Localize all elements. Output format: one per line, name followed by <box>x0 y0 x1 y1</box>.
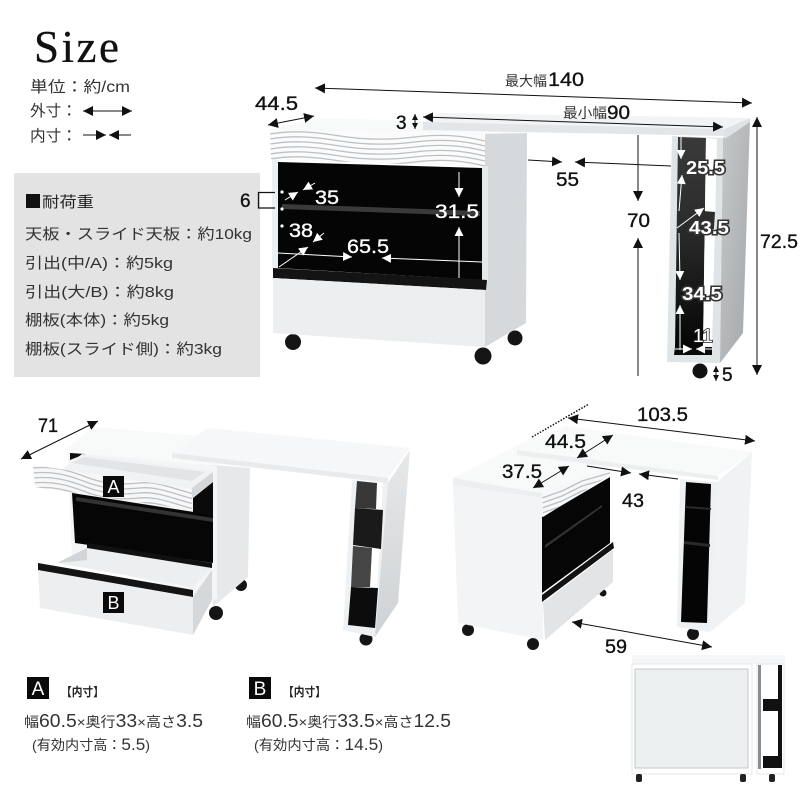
panel: load capacity: 棚板(本体)：約5kg <box>25 312 169 329</box>
dimension: 65.5: 65.5 <box>347 237 389 258</box>
dimension: 43: 43 <box>622 491 644 512</box>
inner size A <box>24 677 203 754</box>
label B <box>103 592 124 613</box>
dimension: 44.5 <box>545 432 613 458</box>
heading: load capacity <box>26 194 94 211</box>
dimension: 5 caster: 5 <box>722 365 733 386</box>
dimension: 6 shelf pitch <box>240 191 275 212</box>
panel: load capacity <box>14 173 260 377</box>
inner size B: (有効内寸高：14.5) <box>254 735 383 754</box>
panel: load capacity: 棚板(スライド側)：約3kg <box>25 341 222 358</box>
dimension: 59: 59 <box>605 637 627 658</box>
slide leg <box>343 450 410 637</box>
dimension: 43.5: 43.5 <box>689 218 729 238</box>
inner size B: 【内寸】 <box>283 684 326 699</box>
inner size A: (有効内寸高：5.5) <box>32 735 150 754</box>
dimension: 103.5: 103.5 <box>637 405 688 426</box>
dimension: 31.5: 31.5 <box>435 202 479 223</box>
dimension: 44.5 depth: 44.5 <box>255 94 298 115</box>
dimension: 35: 35 <box>315 188 339 209</box>
legend: units and arrows: 外寸： <box>30 102 77 120</box>
dimension: 43 <box>587 466 678 512</box>
dimension: 37.5 <box>502 462 569 488</box>
label B: B <box>107 593 120 613</box>
dimension: 44.5 depth <box>255 94 314 125</box>
panel: load capacity: 引出(中/A)：約5kg <box>25 255 173 272</box>
dimension: 11: 11 <box>693 326 713 346</box>
product: rotated L view <box>453 450 752 650</box>
dotted guide <box>532 404 589 437</box>
product: main view cabinet <box>270 118 527 364</box>
inner size A: 【内寸】 <box>61 684 104 699</box>
panel: load capacity: 引出(大/B)：約8kg <box>25 284 174 301</box>
inner size B: 幅60.5×奥行33.5×高さ12.5 <box>246 711 451 731</box>
legend: units and arrows: 内寸： <box>30 127 77 145</box>
dimension: 70: 70 <box>627 211 650 232</box>
dimension: 3 thickness <box>396 113 415 134</box>
heading: load capacity: 耐荷重 <box>42 194 94 211</box>
dimension: 38 <box>279 221 324 267</box>
dimension: 34.5 <box>679 233 722 350</box>
product: main view slide top <box>423 113 750 378</box>
dimension: 31.5 <box>435 172 479 278</box>
dimension: 38: 38 <box>289 221 313 242</box>
dimension: 103.5 <box>568 405 755 441</box>
dimension: max width <box>315 68 752 103</box>
dimension: 44.5: 44.5 <box>545 432 586 453</box>
dimension: 35 <box>285 183 339 209</box>
dimension: 11 <box>675 326 713 349</box>
dimensions: main view <box>240 68 798 386</box>
badge A: A <box>32 679 45 700</box>
dimension: min width <box>423 103 723 127</box>
inner size B <box>246 677 451 754</box>
dimension: 72.5: 72.5 <box>760 232 798 253</box>
dimension: max width: 最大幅 <box>505 73 547 89</box>
badge B: B <box>254 679 266 700</box>
dimension: 6 shelf pitch: 6 <box>240 191 251 212</box>
legend: units and arrows <box>30 78 132 145</box>
legend: units and arrows: 単位：約/cm <box>30 78 130 96</box>
rotated leg <box>677 452 752 632</box>
dimension: 71 <box>21 416 98 459</box>
dimension: min width: 90 <box>607 103 630 124</box>
dimension: 59 <box>572 622 712 658</box>
dimension: 55 <box>528 160 671 191</box>
dimension: 37.5: 37.5 <box>502 462 542 483</box>
dimension: min width: 最小幅 <box>563 105 607 121</box>
dimension: 25.5: 25.5 <box>686 158 725 178</box>
dimension: 3 thickness: 3 <box>396 113 407 134</box>
dimension: 5 caster <box>716 365 733 386</box>
title: Size <box>34 22 121 72</box>
dimension: 71: 71 <box>38 416 58 437</box>
badge B <box>249 677 271 700</box>
product: drawers open view <box>33 427 410 646</box>
badge A <box>27 677 49 700</box>
label A <box>103 476 124 497</box>
dimension: 65.5 <box>278 237 482 262</box>
dimension: 55: 55 <box>556 170 579 191</box>
dimensions: rotated L view <box>502 404 755 658</box>
product: back view <box>632 655 785 782</box>
label A: A <box>107 477 120 497</box>
dimension: 34.5: 34.5 <box>682 284 722 304</box>
dimension: 43.5 <box>677 208 729 238</box>
inner size A: 幅60.5×奥行33×高さ3.5 <box>24 711 203 731</box>
panel: load capacity: 天板・スライド天板：約10kg <box>25 226 252 243</box>
dimension: 25.5 <box>679 137 725 211</box>
dimension: max width: 140 <box>548 70 584 91</box>
